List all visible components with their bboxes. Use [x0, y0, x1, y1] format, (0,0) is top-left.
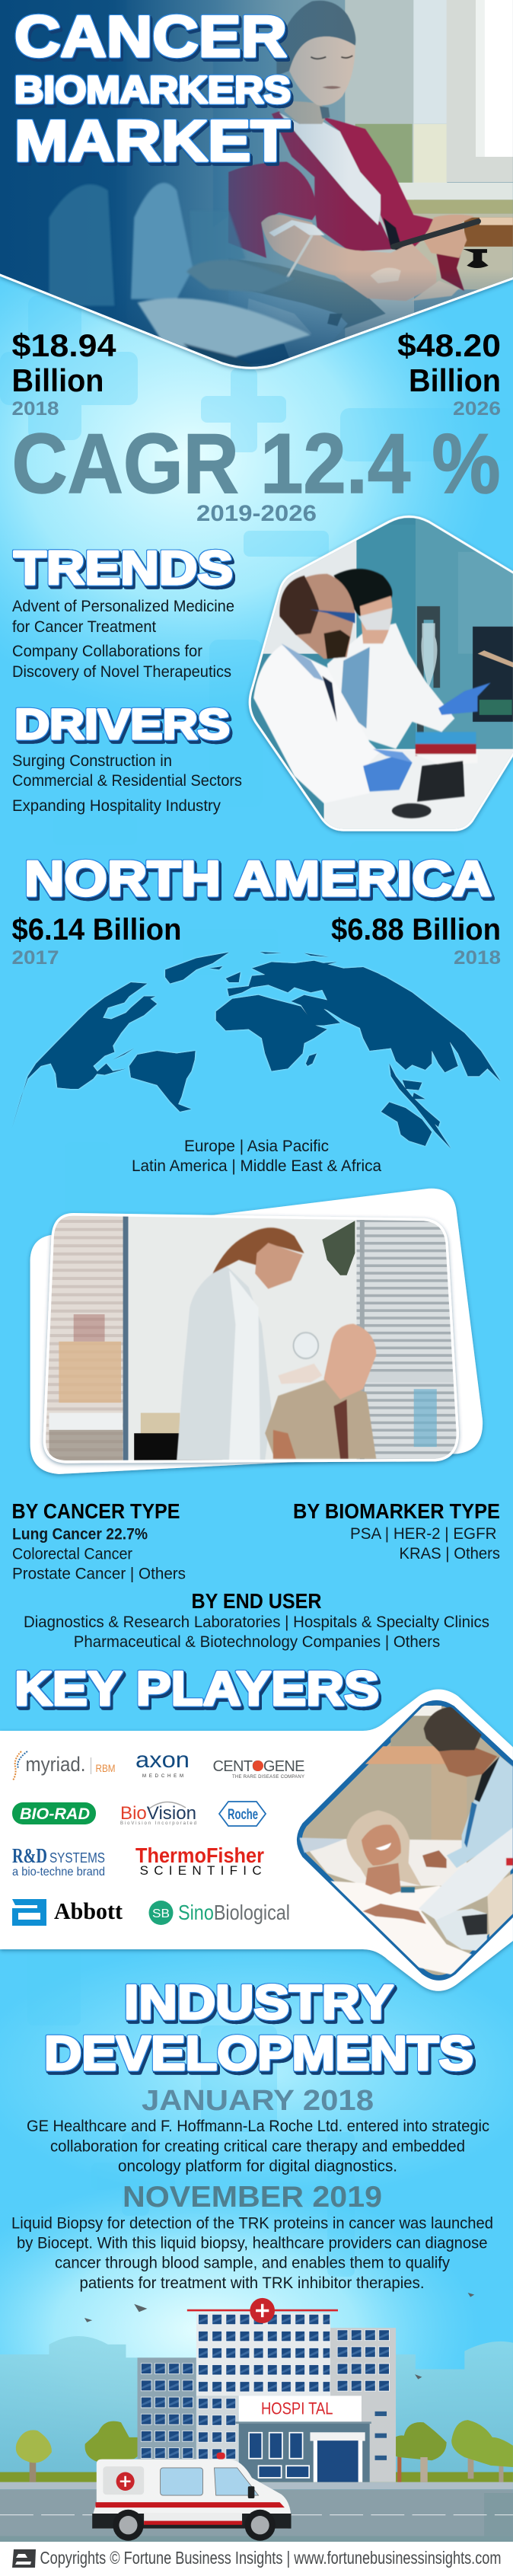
drivers list: Commercial & Residential Sectors	[12, 771, 242, 790]
hero photo: patient receiving treatment	[0, 0, 513, 374]
segment: by cancer type: BY CANCER TYPE	[12, 1499, 180, 1523]
logo: axon medchem: axon	[135, 1748, 190, 1773]
logo: sino biological	[149, 1901, 290, 1925]
market value 2018: $18.94	[12, 327, 116, 363]
market value 2026: Billion	[409, 362, 501, 398]
north america value 2018: $6.88 Billion	[331, 913, 501, 946]
ground	[0, 2472, 513, 2542]
development: january 2018: oncology platform for digital diagnostics.	[118, 2156, 397, 2175]
heading: drivers: DRIVERS	[14, 700, 230, 748]
title: MARKET	[14, 109, 290, 174]
logo: myriad RBM: RBM	[96, 1762, 116, 1774]
drivers list	[12, 752, 242, 815]
logo: roche: Roche	[228, 1807, 258, 1823]
logo: biovision: BioVision	[120, 1803, 196, 1824]
development: november 2019: NOVEMBER 2019	[123, 2181, 382, 2214]
trees	[16, 2420, 513, 2482]
north america value 2017: $6.14 Billion	[12, 913, 181, 946]
trends list: Discovery of Novel Therapeutics	[12, 662, 231, 681]
development: november 2019: Liquid Biopsy for detection of the TRK proteins in cancer was launched	[11, 2214, 493, 2233]
logo: sino biological: SinoBiological	[178, 1901, 290, 1924]
logo: r&d systems	[12, 1844, 105, 1879]
logo: myriad RBM	[13, 1751, 116, 1780]
north america value 2017	[12, 913, 181, 969]
trends list: for Cancer Treatment	[12, 618, 156, 636]
segment: by end user: Pharmaceutical & Biotechnology Companies | Others	[74, 1633, 440, 1651]
trends list: Advent of Personalized Medicine	[12, 597, 234, 615]
title: CANCER	[14, 5, 287, 69]
trends list	[12, 597, 234, 681]
market value 2026: 2026	[453, 398, 501, 420]
market value 2018: Billion	[12, 362, 104, 398]
illustration: hospital scene	[0, 2293, 513, 2542]
development: january 2018: JANUARY 2018	[142, 2085, 374, 2117]
segment: by cancer type: Prostate Cancer | Others	[12, 1564, 186, 1582]
other regions: Europe | Asia Pacific	[184, 1137, 329, 1155]
lab photo: scientists in hexagon frame	[242, 515, 513, 831]
logo: r&d systems: R&D	[12, 1844, 47, 1867]
other regions: Latin America | Middle East & Africa	[132, 1157, 381, 1175]
hospital building	[138, 2298, 396, 2482]
drivers list: Surging Construction in	[12, 752, 172, 770]
market value 2018	[12, 327, 116, 420]
logo: abbott: Abbott	[54, 1898, 123, 1924]
logo: bio-rad	[12, 1802, 96, 1824]
logo: biovision: BioVision Incorporated	[120, 1821, 196, 1826]
CAGR: 2019-2026	[196, 501, 317, 526]
other regions	[132, 1137, 381, 1175]
development: november 2019: cancer through blood sample, and enables them to qualify	[55, 2254, 450, 2272]
ambulance	[92, 2453, 292, 2541]
segment: by end user: BY END USER	[192, 1589, 321, 1613]
skyline	[0, 2336, 513, 2474]
photo card: doctor examining patient	[30, 1189, 483, 1474]
hospital building: HOSPI TAL	[261, 2399, 333, 2418]
north america value 2017: 2017	[12, 947, 59, 969]
logo: sino biological: SB	[152, 1907, 170, 1920]
drivers list: Expanding Hospitality Industry	[12, 796, 221, 815]
segment: by cancer type	[12, 1499, 186, 1582]
development: january 2018	[27, 2085, 489, 2175]
logo: thermo fisher scientific: SCIENTIFIC	[140, 1863, 262, 1878]
world map	[12, 952, 501, 1148]
segment: by biomarker type: PSA | HER-2 | EGFR	[350, 1524, 496, 1543]
development: november 2019: by Biocept. With this liquid biopsy, healthcare providers can diagnose	[17, 2234, 487, 2252]
segment: by cancer type: Colorectal Cancer	[12, 1544, 132, 1563]
market value 2026: $48.20	[397, 327, 501, 363]
logo: r&d systems: a bio-techne brand	[12, 1866, 105, 1879]
photo: doctor with smiling patient	[299, 1703, 513, 1977]
development: january 2018: collaboration for creating critical care therapy and embedded	[50, 2137, 465, 2155]
heading: industry developments: INDUSTRY	[124, 1976, 394, 2029]
market value 2026	[397, 327, 501, 420]
segment: by end user: Diagnostics & Research Laboratories | Hospitals & Specialty Clinics	[24, 1613, 489, 1631]
segment: by end user	[24, 1589, 489, 1651]
north america value 2018	[331, 913, 501, 969]
development: november 2019	[11, 2181, 493, 2292]
development: january 2018: GE Healthcare and F. Hoffmann-La Roche Ltd. entered into strategic	[27, 2117, 489, 2135]
logo: r&d systems: SYSTEMS	[49, 1850, 105, 1866]
north america value 2018: 2018	[454, 947, 501, 969]
heading: industry developments	[44, 1976, 473, 2080]
title: BIOMARKERS	[14, 69, 291, 111]
logo: bio-rad: BIO-RAD	[20, 1805, 90, 1823]
logo: thermo fisher scientific: ThermoFisher	[135, 1843, 264, 1867]
development: november 2019: patients for treatment with TRK inhibitor therapies.	[79, 2274, 425, 2292]
segment: by cancer type: Lung Cancer 22.7%	[12, 1524, 148, 1543]
logo: axon medchem: MEDCHEM	[142, 1774, 183, 1779]
logo: myriad RBM: myriad.	[26, 1753, 85, 1776]
birds	[84, 2293, 474, 2380]
title	[14, 5, 291, 174]
market value 2018: 2018	[12, 398, 59, 420]
heading: north america: NORTH AMERICA	[24, 851, 492, 906]
logo: thermo fisher scientific	[135, 1843, 264, 1878]
logo: roche	[219, 1802, 266, 1826]
logo: centogene: CENTOGENE	[213, 1758, 304, 1775]
heading: trends: TRENDS	[14, 542, 233, 595]
logo: abbott	[12, 1898, 123, 1926]
logo: centogene: THE RARE DISEASE COMPANY	[232, 1775, 304, 1780]
heading: key players: KEY PLAYERS	[14, 1662, 379, 1716]
segment: by biomarker type: KRAS | Others	[399, 1544, 500, 1563]
trends list: Company Collaborations for	[12, 642, 202, 660]
white logo banner	[0, 1690, 513, 1991]
footer bar	[0, 2542, 513, 2576]
footer logo	[12, 2549, 36, 2568]
heading: industry developments: DEVELOPMENTS	[44, 2027, 473, 2080]
segment: by biomarker type	[293, 1499, 500, 1563]
